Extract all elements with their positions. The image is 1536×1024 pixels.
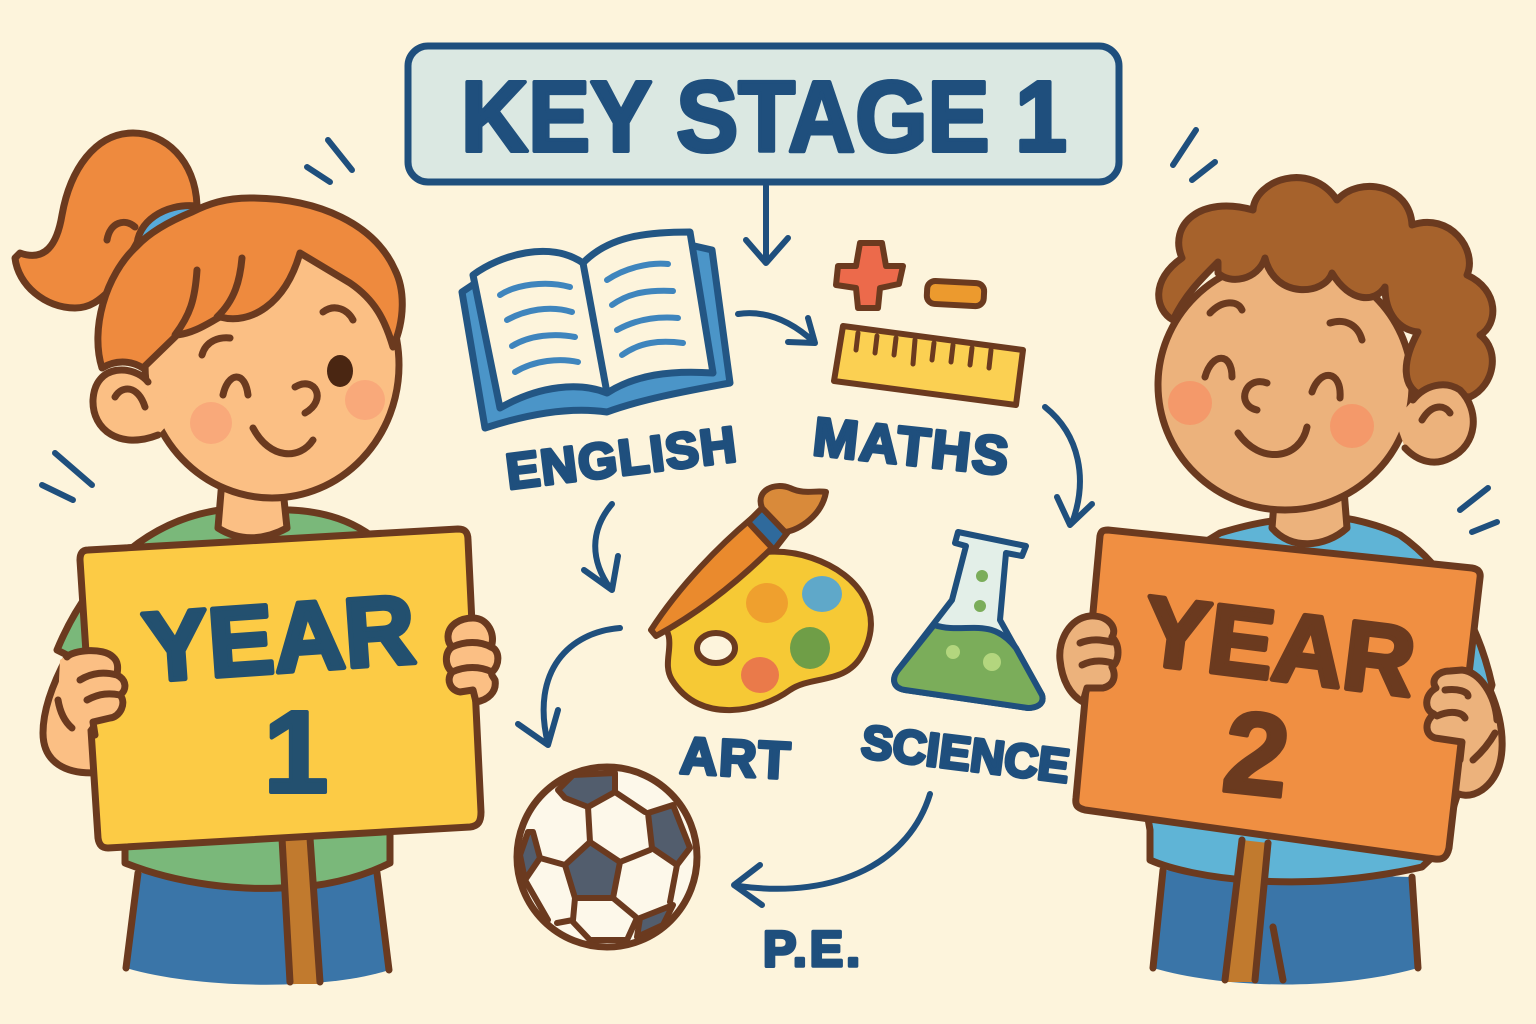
girl left hand: [58, 651, 125, 740]
boy ear: [1395, 385, 1473, 462]
arrow: Maths to Science: [1045, 407, 1092, 525]
boy shirt: [1110, 518, 1492, 882]
sign: Year 2: [1076, 530, 1480, 859]
sign post: Year 1: [282, 838, 320, 984]
icon: ruler: [834, 326, 1023, 405]
motion marks: boy right: [1460, 488, 1497, 532]
girl face: [145, 232, 399, 498]
boy curly hair: [1159, 178, 1493, 397]
boy trousers: [1153, 870, 1418, 984]
girl open eye: [327, 355, 353, 387]
arrow: Science to P.E.: [734, 794, 930, 905]
sign: Year 1: YEAR: [139, 574, 419, 702]
motion marks: girl top: [307, 140, 352, 182]
girl nose and mouth: [253, 384, 317, 454]
sign: Year 2: 2: [1218, 686, 1295, 822]
girl cheeks: [190, 380, 385, 444]
label: Science: SCIENCE: [859, 714, 1072, 793]
boy face: [1158, 260, 1412, 510]
label: Art: ART: [679, 727, 793, 791]
girl right hand: [446, 618, 498, 702]
boy right hand: [1427, 670, 1497, 762]
girl trousers: [126, 873, 389, 985]
icon: open book: [462, 232, 730, 428]
label: English: ENGLISH: [503, 416, 741, 500]
title banner: KEY STAGE 1: [461, 61, 1067, 173]
girl hair strands: [175, 258, 242, 335]
icon: paintbrush and palette: [651, 486, 871, 710]
girl brows and winking eye: [202, 308, 353, 395]
icon: science flask: [894, 532, 1043, 708]
icon: plus and minus: [836, 243, 985, 308]
character: girl, Year 1: [15, 133, 498, 985]
boy cheeks: [1168, 381, 1374, 448]
arrow: English to Art: [584, 504, 618, 590]
icon: football: [517, 767, 697, 947]
girl shirt: [57, 510, 400, 888]
girl ponytail curl: [107, 222, 135, 240]
label: P.E.: P.E.: [763, 921, 863, 977]
label: Maths: MATHS: [810, 407, 1013, 487]
motion marks: boy top: [1173, 130, 1215, 180]
boy left hand: [1060, 616, 1118, 702]
sign: Year 1: 1: [264, 687, 328, 817]
arrow: Art to P.E.: [518, 628, 620, 745]
arrow: title to subjects: [746, 186, 788, 263]
boy nose and mouth: [1238, 382, 1307, 455]
girl ear: [93, 370, 172, 440]
boy neck: [1272, 490, 1347, 544]
character: boy, Year 2: [1060, 130, 1502, 984]
arrow: English to Maths: [738, 313, 815, 343]
girl neck: [218, 480, 287, 538]
motion marks: girl left: [42, 453, 92, 500]
boy arm: [1450, 690, 1502, 795]
sign: Year 2: YEAR: [1137, 575, 1421, 717]
girl hair: [98, 198, 402, 368]
sign post: Year 2: [1225, 840, 1268, 982]
girl ponytail: [15, 133, 197, 308]
girl arm: [43, 657, 105, 773]
girl hair tie: [137, 206, 196, 250]
sign: Year 1: [80, 529, 481, 848]
boy eyes and brows: [1205, 303, 1362, 398]
